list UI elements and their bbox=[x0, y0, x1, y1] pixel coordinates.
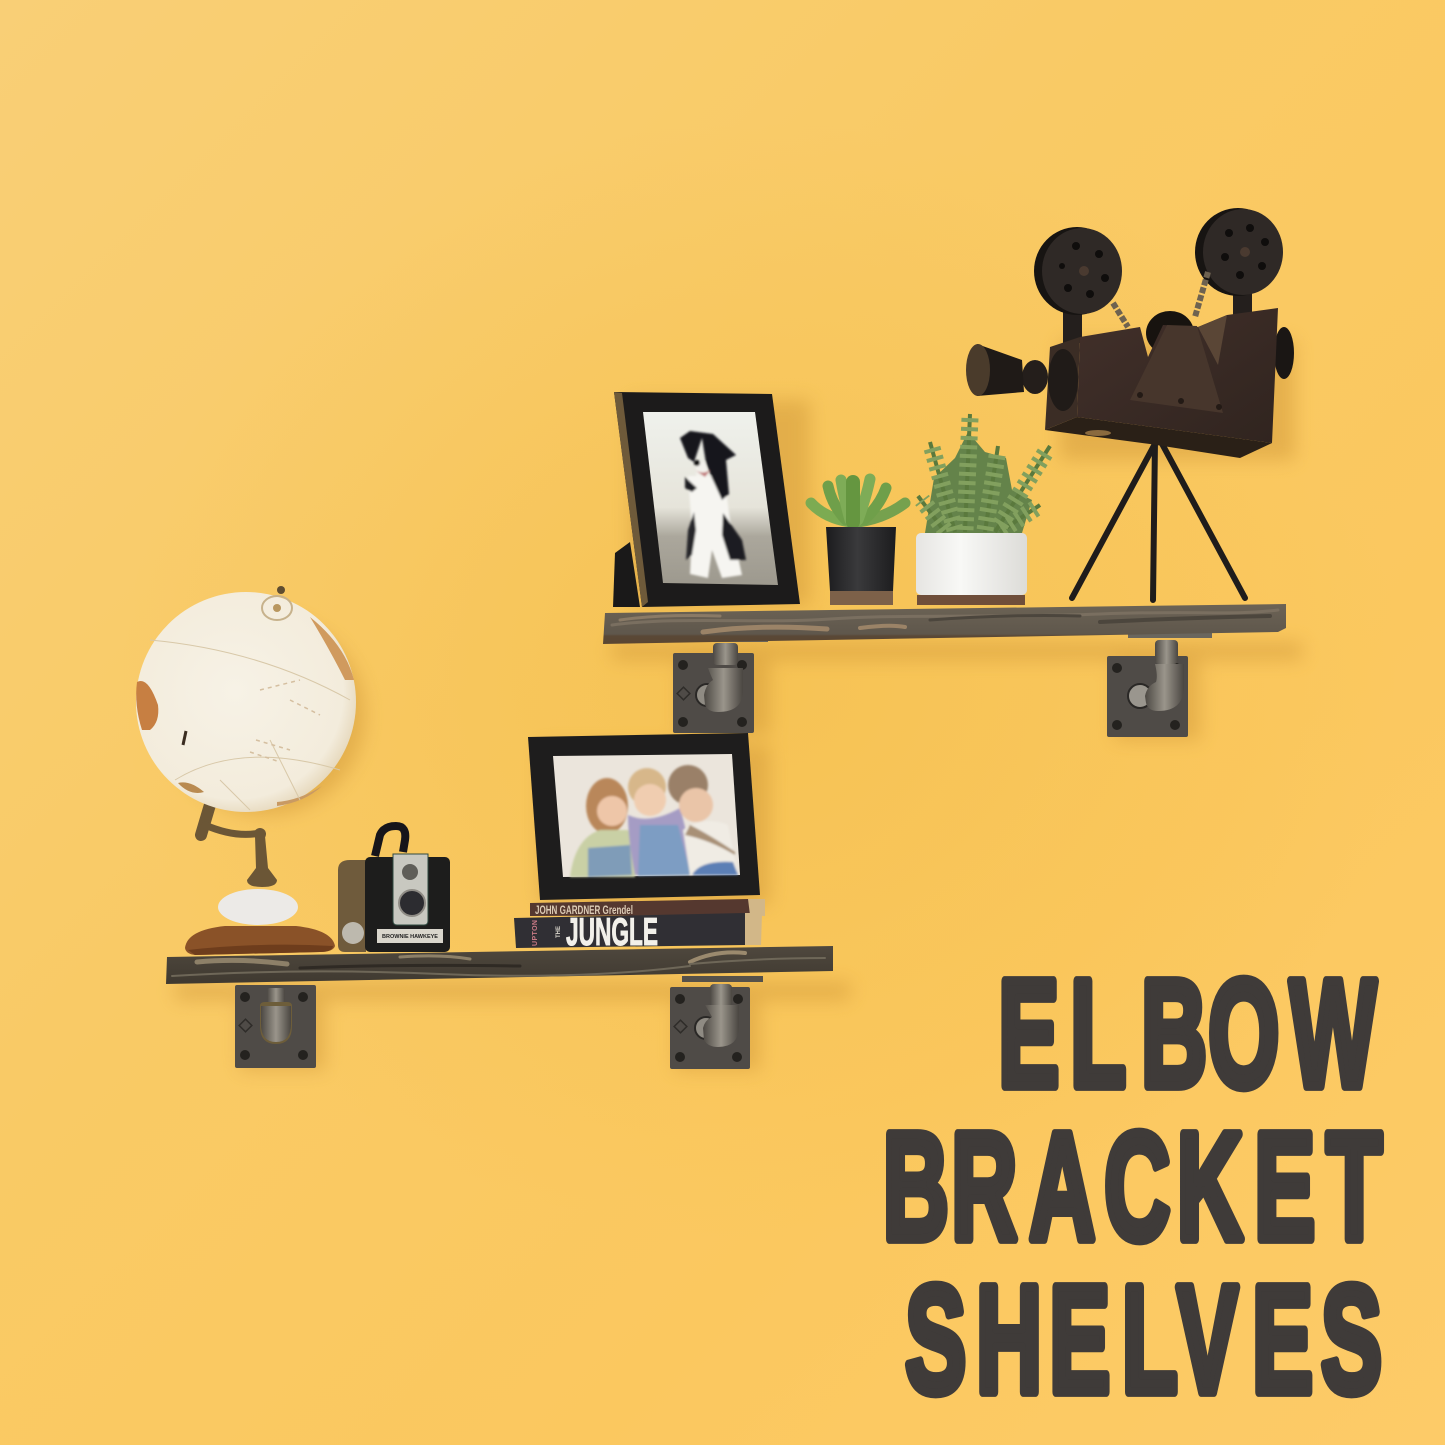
fern plant in white pot bbox=[916, 414, 1050, 605]
bracket: upper left bbox=[673, 635, 768, 733]
globe markings bbox=[136, 596, 354, 810]
globe sphere bbox=[136, 592, 356, 812]
vintage box camera bbox=[338, 826, 450, 952]
frame bbox=[614, 392, 800, 607]
camera side bbox=[338, 860, 366, 952]
desk globe on stand bbox=[136, 586, 356, 955]
fern stems and leaves bbox=[918, 414, 1050, 533]
photo of dog bbox=[643, 412, 778, 585]
lower book bbox=[514, 911, 762, 954]
black photo frame with children bbox=[528, 733, 760, 900]
lower book: THE bbox=[556, 926, 562, 938]
upper book: JOHN GARDNER Grendel bbox=[535, 903, 633, 917]
right film reel bbox=[1195, 208, 1283, 296]
lower book: UPTON bbox=[532, 920, 539, 946]
left film reel bbox=[1034, 227, 1122, 315]
lens assembly bbox=[966, 344, 1078, 411]
reel supports bbox=[1063, 285, 1252, 343]
triangular plate bbox=[1130, 325, 1223, 413]
succulent in black pot bbox=[811, 479, 905, 605]
soft shadows on wall bbox=[165, 340, 1302, 1070]
chain links bbox=[1113, 272, 1208, 327]
frame bbox=[528, 733, 760, 900]
shelf board: upper bbox=[603, 604, 1286, 644]
title line: BRACKET: BRACKET bbox=[883, 1101, 1382, 1272]
camera body bbox=[365, 857, 450, 952]
projector body side bbox=[1045, 337, 1080, 430]
white knob bbox=[218, 889, 298, 925]
camera face plate bbox=[393, 854, 428, 925]
title line: SHELVES: SHELVES bbox=[905, 1254, 1382, 1425]
bracket: upper right bbox=[1107, 632, 1212, 737]
frame kickstand bbox=[613, 542, 640, 607]
globe top pin bbox=[277, 586, 285, 594]
upper book bbox=[530, 899, 765, 917]
camera strap bbox=[375, 826, 405, 856]
roller bbox=[1146, 311, 1194, 355]
lower book: JUNGLE bbox=[566, 911, 658, 954]
wood base bbox=[185, 926, 335, 955]
vintage movie projector bbox=[966, 208, 1294, 600]
lower shelf with brackets bbox=[166, 946, 833, 1069]
back knob bbox=[1274, 327, 1294, 379]
shelf board: lower bbox=[166, 946, 833, 984]
brass stand bbox=[201, 798, 277, 887]
camera label: BROWNIE HAWKEYE bbox=[382, 934, 438, 940]
white pot bbox=[916, 533, 1027, 595]
title line: ELBOW: ELBOW bbox=[998, 948, 1376, 1119]
black photo frame with dog bbox=[613, 392, 800, 607]
photo of children bbox=[553, 754, 740, 877]
title: elbow bracket shelves bbox=[883, 948, 1382, 1425]
tripod legs bbox=[1072, 440, 1245, 600]
black pot bbox=[826, 527, 896, 591]
projector body front bbox=[1077, 308, 1278, 443]
bracket: lower left bbox=[235, 985, 316, 1068]
projector body underside bbox=[1045, 417, 1272, 458]
stack of books bbox=[514, 899, 765, 954]
succulent leaves bbox=[811, 479, 905, 522]
bracket: lower right bbox=[670, 976, 763, 1069]
upper shelf with brackets bbox=[603, 604, 1286, 737]
